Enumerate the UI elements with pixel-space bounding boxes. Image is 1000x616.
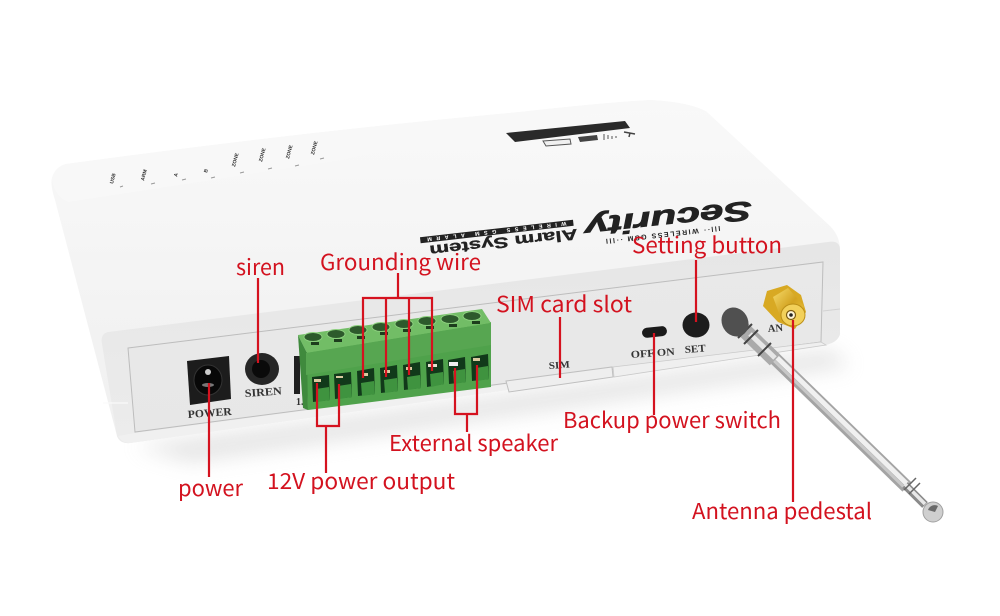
jack contact xyxy=(202,383,214,387)
slot lower faces xyxy=(316,366,489,402)
top marks xyxy=(311,321,480,345)
main rod outline xyxy=(762,346,907,487)
LCD window xyxy=(506,121,630,142)
speaker bracket xyxy=(455,365,477,432)
SIM printed label: SIM xyxy=(548,360,571,372)
top lip band xyxy=(52,100,707,202)
front face xyxy=(102,242,840,443)
callout: power xyxy=(178,383,243,503)
wireless tagline: Ill·· WIRELESS GSM ··llI xyxy=(605,224,721,244)
gold hex nut xyxy=(763,285,806,329)
power text: power xyxy=(178,471,243,503)
LED text: USB xyxy=(109,172,118,185)
siren label: SIREN xyxy=(244,385,282,400)
switch slot xyxy=(642,326,667,338)
collars xyxy=(904,478,920,494)
product name: Alarm System xyxy=(429,225,578,259)
power jack xyxy=(187,356,233,421)
side seam xyxy=(823,309,840,311)
siren hole xyxy=(252,360,270,378)
envelope icon xyxy=(543,139,571,146)
terminal slots xyxy=(312,354,489,402)
12V partial label: 1. xyxy=(296,397,304,408)
gold barrel xyxy=(773,288,804,326)
SIM text: SIM card slot xyxy=(496,287,632,319)
siren leader xyxy=(257,278,259,363)
LCD status icons xyxy=(543,132,635,146)
antenna ball xyxy=(923,502,943,522)
backup power switch xyxy=(630,326,676,361)
pin xyxy=(789,313,793,317)
back panel xyxy=(128,262,823,432)
wireless band xyxy=(420,219,574,243)
connector backing xyxy=(294,356,300,394)
grounding text: Grounding wire xyxy=(320,245,481,277)
callout: SIM card slot xyxy=(496,287,632,378)
phone icon xyxy=(578,135,598,142)
siren text: siren xyxy=(236,250,285,282)
LED labels: ARM xyxy=(140,169,149,182)
LED labels xyxy=(109,140,324,187)
callout: 12V power output xyxy=(267,383,455,496)
setting text: Setting button xyxy=(632,228,782,260)
backup text: Backup power switch xyxy=(563,403,781,435)
speaker text: External speaker xyxy=(389,426,558,458)
button hole xyxy=(682,312,710,338)
LED labels: ZONE xyxy=(310,140,320,156)
antenna text: Antenna pedestal xyxy=(692,494,872,526)
centre hole xyxy=(786,310,796,320)
block front xyxy=(306,322,491,410)
band fill xyxy=(420,220,574,243)
joint shine xyxy=(750,334,775,358)
antenna xyxy=(716,303,943,522)
SIM flap xyxy=(506,367,613,392)
block left xyxy=(298,335,308,410)
siren socket xyxy=(245,353,279,385)
antenna base xyxy=(716,303,754,341)
LED labels: ZONE xyxy=(231,152,241,168)
jack label: POWER xyxy=(187,406,233,421)
LED labels: B xyxy=(203,168,210,174)
ball highlight xyxy=(928,505,938,512)
12V text: 12V power output xyxy=(267,464,455,496)
12V bracket xyxy=(317,383,339,473)
block mid ridge xyxy=(306,323,491,375)
band text: WIRELESS GSM ALARM xyxy=(426,220,567,242)
body shell xyxy=(51,100,840,443)
setting leader xyxy=(695,260,697,322)
antenna tip section xyxy=(905,485,925,505)
hinge bands xyxy=(738,324,771,356)
antenna label: AN xyxy=(767,323,784,335)
backup leader xyxy=(653,333,655,415)
SIM leader xyxy=(559,317,561,378)
left seam xyxy=(103,402,128,404)
lower band xyxy=(118,343,826,443)
LED labels: A xyxy=(173,172,180,178)
grounding bracket xyxy=(363,273,432,378)
callout: external speaker xyxy=(389,365,558,458)
button label: SET xyxy=(684,344,706,356)
main rod shine xyxy=(762,343,907,484)
jack pin xyxy=(205,369,211,375)
setting button xyxy=(682,312,710,356)
LED labels: ZONE xyxy=(258,147,268,163)
signal icon xyxy=(604,134,616,140)
callout: siren xyxy=(236,250,285,363)
LED labels: ZONE xyxy=(285,144,295,160)
right flap xyxy=(613,342,826,377)
green terminal block xyxy=(298,309,491,410)
main rod highlight xyxy=(762,349,907,490)
device body xyxy=(51,100,840,443)
screw holes xyxy=(304,312,481,342)
jack socket xyxy=(194,365,222,395)
switch label: OFF ON xyxy=(630,347,676,361)
barrel face xyxy=(781,304,805,326)
power leader xyxy=(208,383,210,477)
rod joint xyxy=(742,328,775,360)
brand name: Security xyxy=(580,195,754,243)
tip section shine xyxy=(905,484,925,504)
jack housing xyxy=(187,356,231,405)
siren jack xyxy=(244,353,282,400)
block top xyxy=(298,309,491,353)
cast shadow xyxy=(135,350,850,462)
antenna icon xyxy=(624,132,635,137)
SMA connector xyxy=(763,285,806,329)
metal contacts xyxy=(314,358,480,382)
antenna leader xyxy=(792,320,794,502)
LED marks xyxy=(120,158,324,187)
callout: grounding wire xyxy=(320,245,481,378)
